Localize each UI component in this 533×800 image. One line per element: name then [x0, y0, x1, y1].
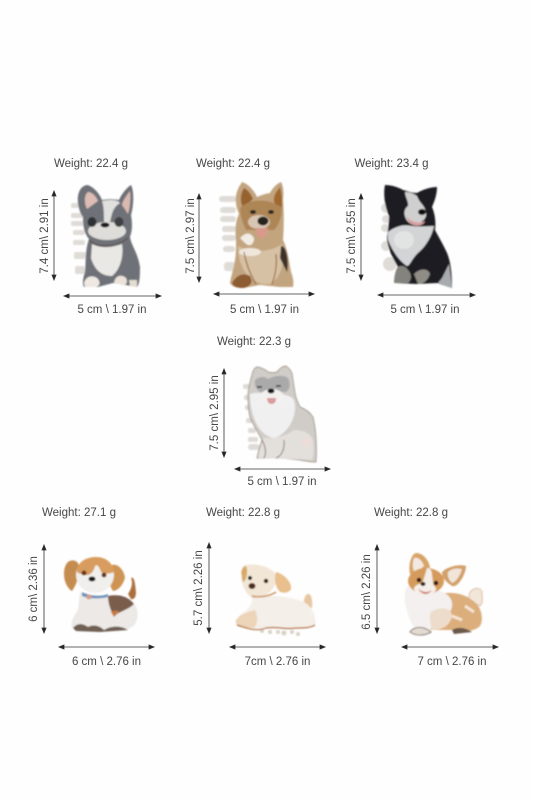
height label: 5.7 cm\ 2.26 in — [193, 550, 205, 626]
width label: 5 cm \ 1.97 in — [230, 304, 299, 316]
height arrow — [222, 369, 226, 457]
height arrow — [375, 545, 379, 633]
height label: 7.5 cm\ 2.55 in — [346, 198, 358, 274]
width label: 5 cm \ 1.97 in — [390, 304, 460, 316]
icon: german shepherd — [219, 182, 293, 288]
width arrow — [378, 293, 475, 297]
panel: french bulldog clip — [39, 158, 161, 316]
weight label: Weight: 22.4 g — [196, 158, 270, 170]
height arrow — [359, 194, 363, 280]
icon: beagle puppy — [64, 557, 138, 632]
height label: 7.5 cm\ 2.97 in — [185, 198, 197, 274]
width arrow — [402, 645, 498, 649]
height arrow — [207, 543, 211, 633]
height label: 6 cm\ 2.36 in — [28, 556, 40, 622]
width arrow — [235, 467, 330, 471]
width label: 7 cm \ 2.76 in — [417, 656, 487, 668]
width arrow — [59, 645, 154, 649]
width arrow — [230, 645, 325, 649]
weight label: Weight: 23.4 g — [355, 158, 428, 170]
panel: corgi clip — [361, 507, 498, 668]
panel: golden puppy clip — [193, 507, 325, 668]
icon: corgi — [405, 553, 482, 635]
panel: german shepherd clip — [185, 158, 314, 316]
width arrow — [214, 292, 314, 296]
width label: 5 cm \ 1.97 in — [247, 476, 317, 488]
icon: pomeranian — [243, 366, 316, 462]
icon: golden puppy — [236, 564, 316, 636]
width arrow — [64, 294, 161, 298]
height label: 7.5 cm\ 2.95 in — [209, 375, 221, 451]
icon: border collie — [381, 185, 452, 288]
weight label: Weight: 22.3 g — [217, 336, 291, 348]
height arrow — [52, 191, 56, 280]
height arrow — [197, 194, 201, 282]
height label: 6.5 cm\ 2.26 in — [361, 554, 373, 630]
height arrow — [42, 545, 46, 633]
panel: pomeranian clip — [209, 336, 330, 488]
panel: beagle puppy clip — [28, 507, 154, 668]
width label: 6 cm \ 2.76 in — [72, 656, 141, 668]
width label: 7cm \ 2.76 in — [245, 656, 310, 668]
weight label: Weight: 27.1 g — [42, 507, 116, 519]
weight label: Weight: 22.8 g — [206, 507, 280, 519]
weight label: Weight: 22.8 g — [374, 507, 448, 519]
icon: french bulldog — [71, 185, 140, 287]
width label: 5 cm \ 1.97 in — [77, 304, 147, 316]
panel: border collie clip — [346, 158, 475, 316]
height label: 7.4 cm\ 2.91 in — [39, 198, 51, 274]
weight label: Weight: 22.4 g — [54, 158, 128, 170]
